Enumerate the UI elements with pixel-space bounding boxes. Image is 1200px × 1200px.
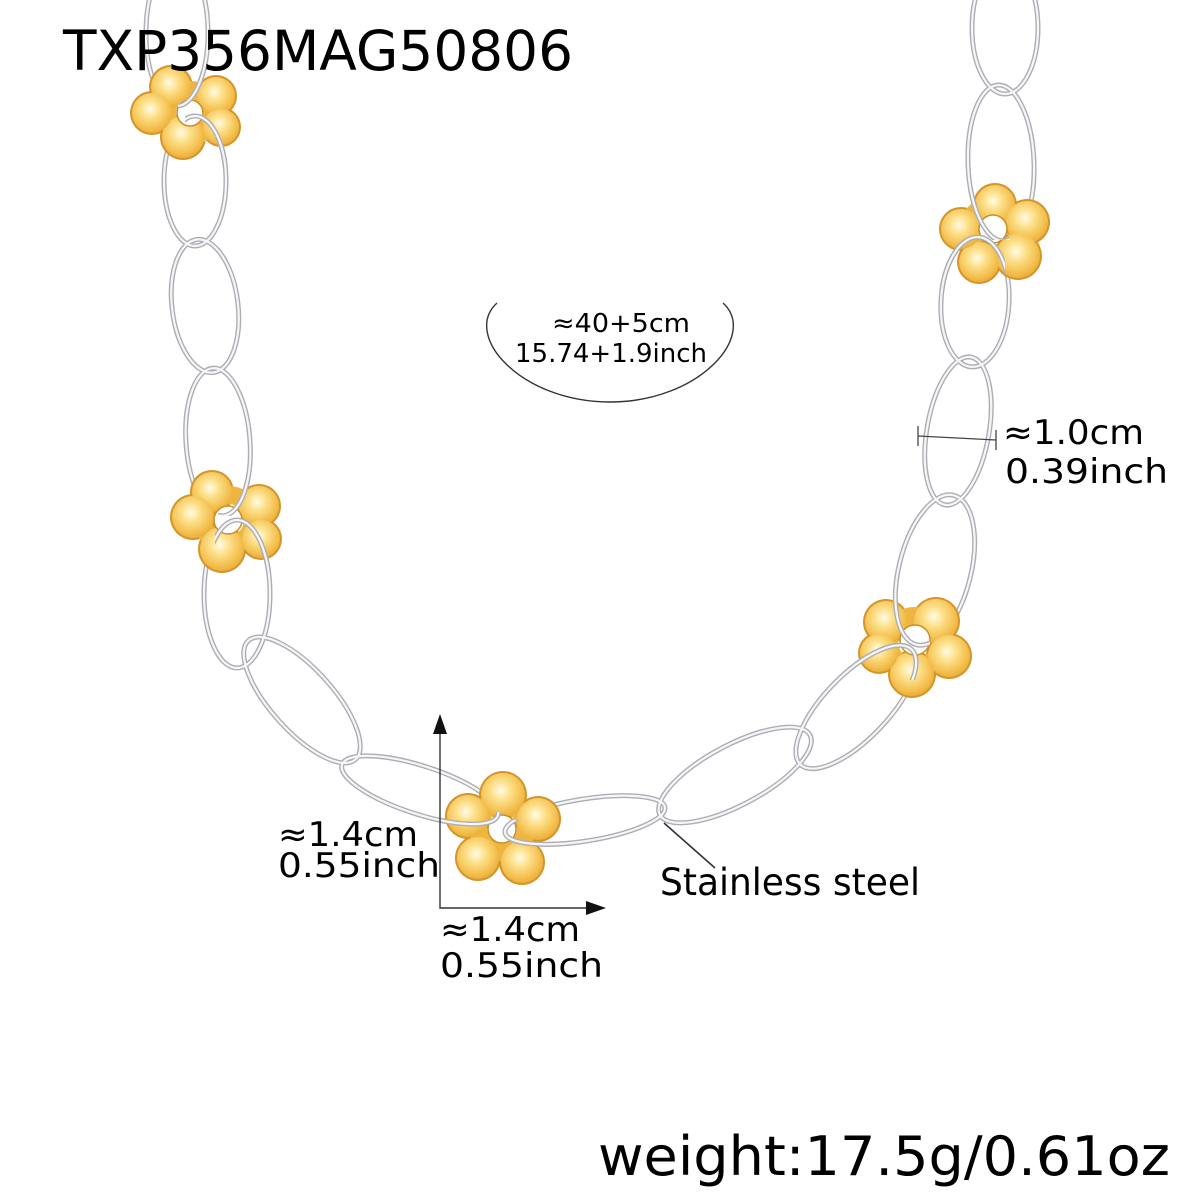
title: product code: TXP356MAG50806 bbox=[62, 19, 573, 83]
icon: gold flower charm right bbox=[858, 597, 972, 698]
material callout: Stainless steel bbox=[660, 861, 920, 904]
necklace length diagram: 15.74+1.9inch bbox=[515, 339, 707, 369]
weight label: weight:17.5g/0.61oz bbox=[598, 1125, 1170, 1188]
material callout bbox=[660, 823, 920, 904]
flower height label bbox=[278, 815, 440, 886]
flower height and width arrows bbox=[433, 714, 606, 915]
necklace chain links bbox=[146, 0, 1038, 853]
flower height label: ≈1.4cm bbox=[278, 815, 418, 855]
flower height label: 0.55inch bbox=[278, 846, 440, 886]
flower width label: ≈1.4cm bbox=[440, 910, 580, 950]
necklace length diagram bbox=[487, 303, 733, 402]
necklace length diagram: ≈40+5cm bbox=[552, 309, 690, 339]
link width measurement: ≈1.0cm bbox=[1003, 413, 1144, 453]
flower width label bbox=[440, 910, 603, 986]
link width measurement bbox=[918, 413, 1168, 492]
chain links passing over flowers bbox=[178, 70, 1010, 863]
flower width label: 0.55inch bbox=[440, 946, 603, 986]
icon: gold flower charm top left bbox=[130, 65, 241, 160]
link width measurement: 0.39inch bbox=[1005, 452, 1168, 492]
icon: gold flower charm top right bbox=[939, 183, 1050, 284]
icon: gold flower charm left bbox=[170, 470, 282, 573]
icon: gold flower charm bottom centre bbox=[445, 771, 561, 885]
